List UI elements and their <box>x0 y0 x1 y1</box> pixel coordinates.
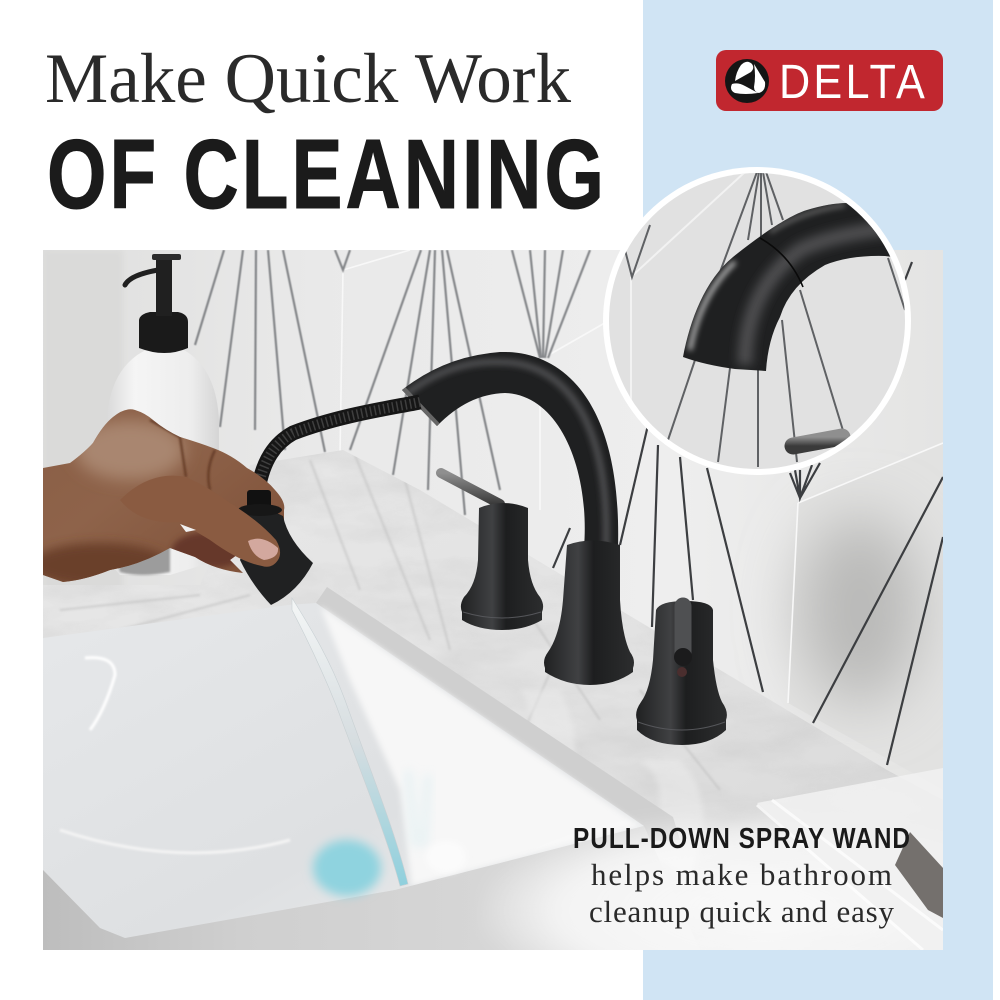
marble sink edge band <box>316 587 680 842</box>
lens rays <box>625 172 905 467</box>
caption heading: PULL-DOWN SPRAY WAND <box>573 822 911 854</box>
main faucet <box>395 345 634 685</box>
faucet base <box>544 540 634 685</box>
caption veil <box>470 800 960 970</box>
dark palm <box>43 540 163 582</box>
thumbnail <box>248 539 278 560</box>
vanity marble counter <box>43 450 898 829</box>
title line 1: Make Quick Work <box>45 40 571 118</box>
sink basin <box>43 603 644 938</box>
Delta logo <box>716 50 943 111</box>
water stream <box>292 598 408 886</box>
zoom detail circle <box>600 160 920 480</box>
wall shadow at left <box>118 256 119 582</box>
right handle lever <box>674 606 692 652</box>
caption line 1: helps make bathroom <box>591 857 892 892</box>
title <box>45 40 607 229</box>
left handle <box>441 473 543 630</box>
lower marble strip <box>43 826 700 950</box>
bottle base shadow <box>118 548 172 576</box>
sink rim highlight <box>85 658 115 730</box>
pump collar <box>139 312 188 353</box>
wand collar <box>247 490 271 506</box>
gap between thumb and fingers <box>180 524 196 532</box>
logo mark <box>731 62 765 94</box>
caption <box>573 822 911 929</box>
product photo <box>30 250 960 970</box>
lit knuckles <box>75 420 185 480</box>
lens spout joint <box>760 238 803 287</box>
thumb <box>120 476 280 567</box>
lens spout <box>680 200 905 375</box>
braided hose <box>258 402 420 490</box>
hand back <box>43 409 284 582</box>
pump head <box>152 254 181 260</box>
wall <box>43 250 943 776</box>
caption line 2: cleanup quick and easy <box>589 894 894 929</box>
soap bottle <box>107 254 219 575</box>
pump stem <box>156 260 172 312</box>
right tile with cast shadow <box>340 250 943 790</box>
blue background panel <box>643 0 993 1000</box>
title line 2: OF CLEANING <box>47 119 607 229</box>
spray wand <box>238 490 313 605</box>
ray lines, soft <box>195 250 590 515</box>
teal splash in drain <box>308 776 430 902</box>
sink bowl reflection <box>60 830 290 853</box>
logo wordmark: DELTA <box>779 55 928 109</box>
temperature knob <box>674 648 692 666</box>
red indicator dot <box>677 667 687 677</box>
lens handle <box>793 437 842 446</box>
pump spout <box>125 270 158 285</box>
right handle <box>636 601 727 745</box>
product tube on tray <box>895 832 943 918</box>
bottle body <box>107 348 219 575</box>
sink right wall, brighter <box>320 606 640 886</box>
tray at lower right <box>757 768 943 950</box>
marble veining and faucet reflections <box>44 451 806 808</box>
lower finger shadow <box>172 532 248 568</box>
ray lines, sharp <box>553 262 943 765</box>
spout body <box>402 352 618 544</box>
wand flange <box>238 504 282 516</box>
finger creases <box>150 420 215 490</box>
